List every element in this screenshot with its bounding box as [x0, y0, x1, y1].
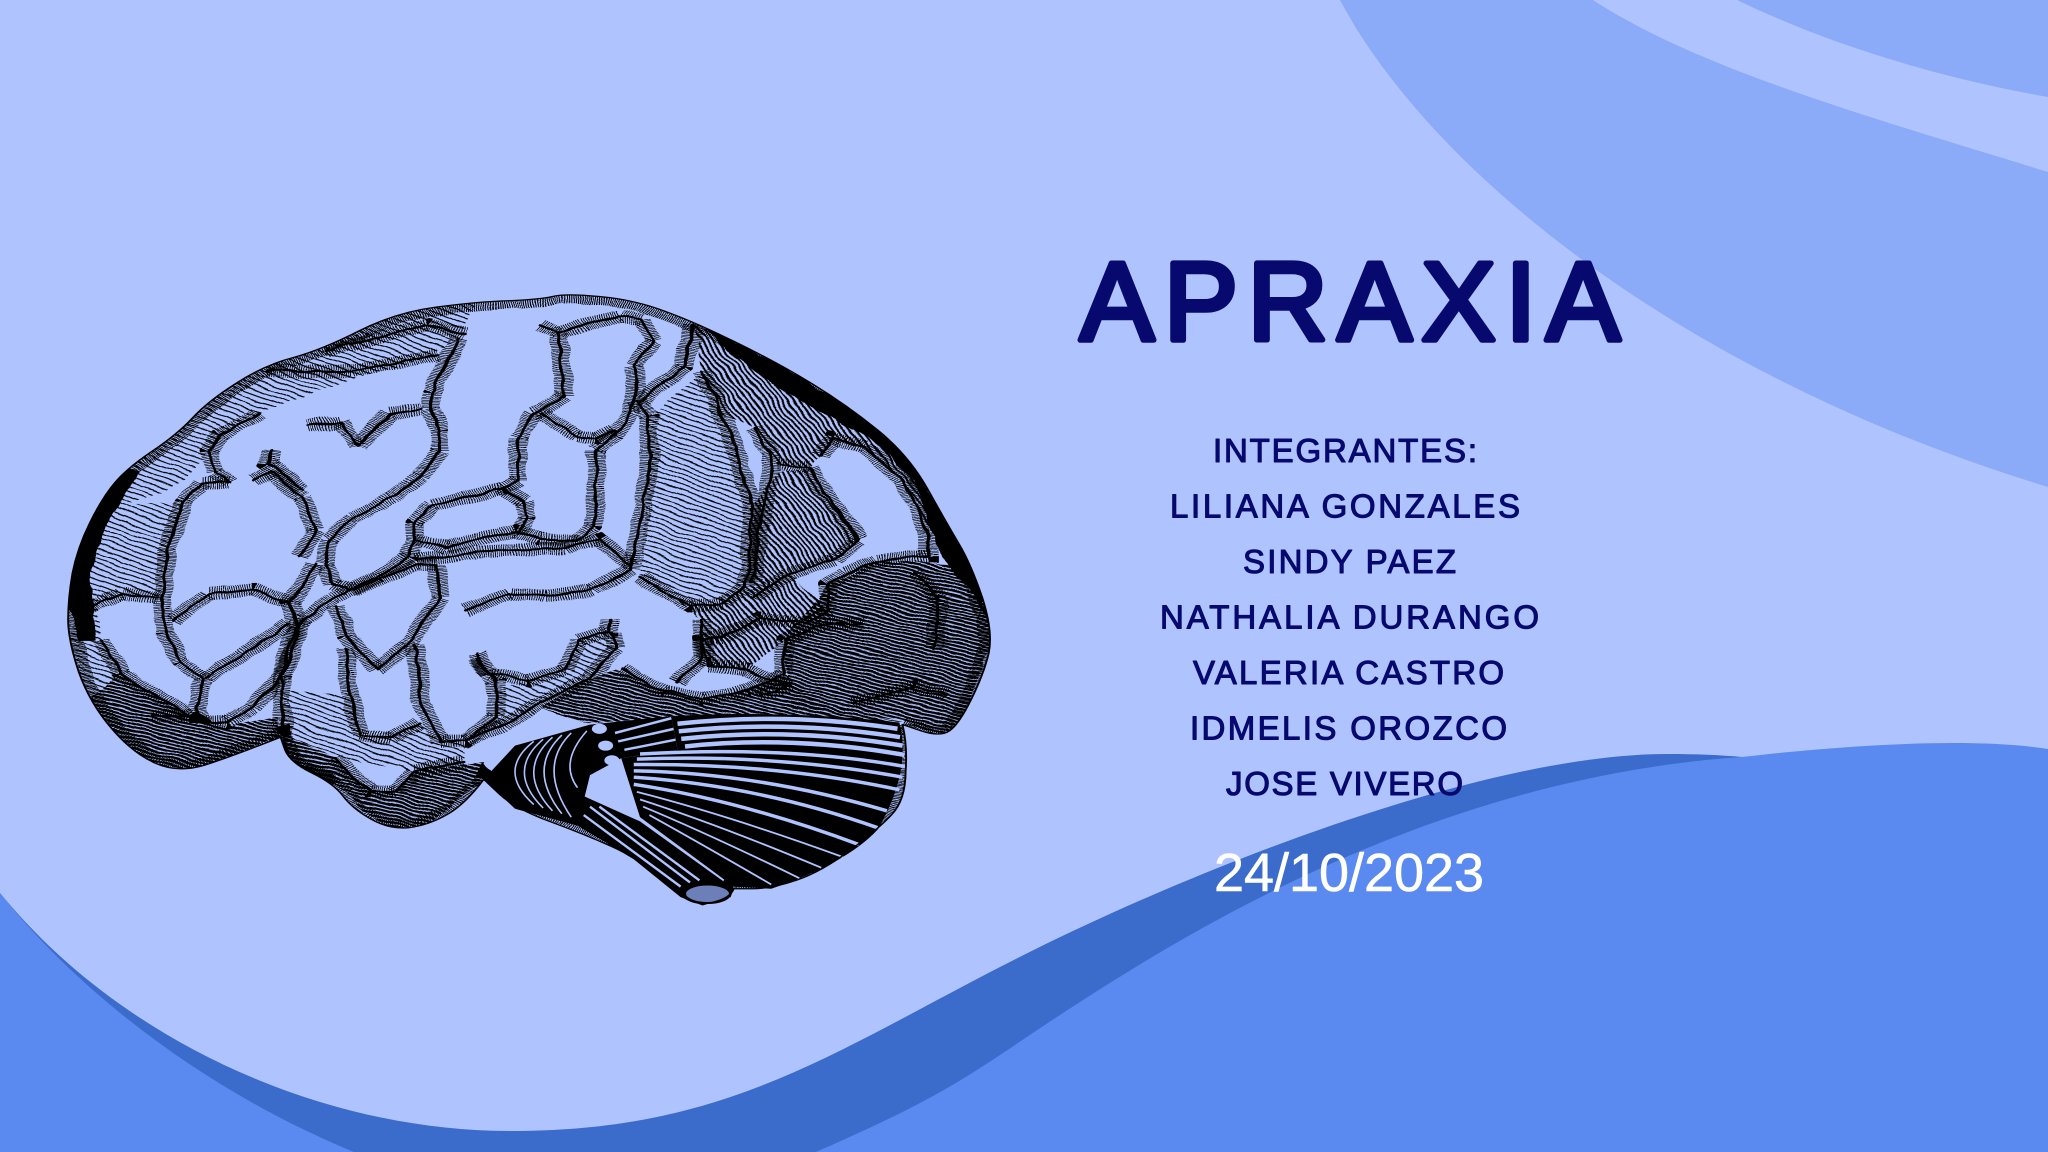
name: JOSE VIVERO	[1226, 765, 1463, 802]
brain silhouette	[68, 295, 990, 903]
decorative corner: top right	[1737, 0, 2048, 97]
brain contour	[68, 295, 990, 903]
wave: front layer	[0, 743, 2048, 1152]
title: APRAXIA	[1080, 240, 1620, 364]
members list	[1160, 432, 1539, 802]
decorative band: top right	[1340, 0, 2048, 487]
name: IDMELIS OROZCO	[1190, 710, 1507, 746]
medulla tube	[578, 796, 734, 906]
brainstem and pons	[484, 716, 678, 826]
name: VALERIA CASTRO	[1193, 654, 1504, 691]
cerebellum	[621, 714, 906, 889]
date: 24/10/2023	[1214, 843, 1484, 903]
name: LILIANA GONZALES	[1170, 488, 1520, 525]
wave: dark back layer	[0, 754, 1742, 1152]
illustration: engraved brain	[68, 295, 996, 906]
name: NATHALIA DURANGO	[1160, 598, 1539, 636]
heading: integrantes: INTEGRANTES:	[1213, 432, 1477, 469]
engraving: shading and sulci	[68, 295, 996, 903]
name: SINDY PAEZ	[1243, 543, 1456, 580]
